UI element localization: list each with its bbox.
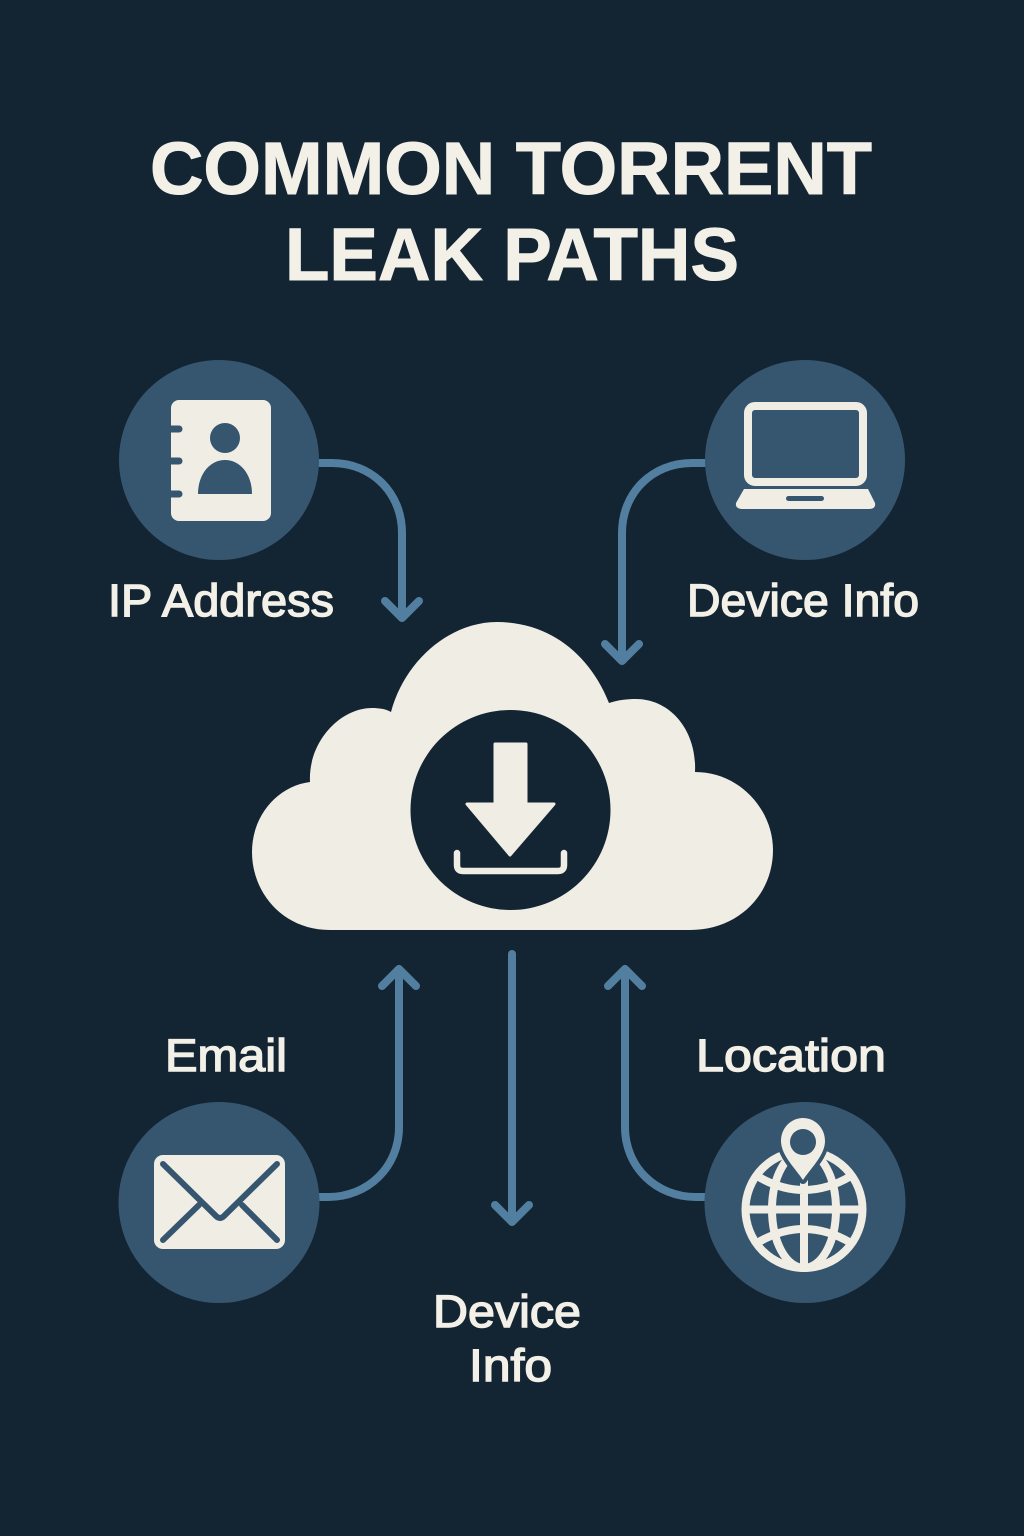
label: IP Address: IP Address [108,575,334,626]
icon: address book [119,360,319,560]
label: Device Info bottom: Device [433,1286,581,1337]
label: Device Info top: Device Info [687,575,919,626]
label: Device Info bottom: Info [469,1340,552,1391]
arrow: Email to cloud [319,969,416,1197]
arrow: Location to cloud [608,969,705,1197]
arrow: Device Info to cloud [605,463,705,661]
label: Device Info bottom [433,1286,581,1391]
title: LEAK PATHS [285,213,739,296]
label: Email: Email [165,1030,287,1081]
icon: envelope [118,1102,320,1303]
title [150,127,872,296]
arrow: IP Address to cloud [319,463,419,618]
title: COMMON TORRENT [150,127,872,210]
icon: laptop [705,360,905,560]
icon: cloud with download [252,622,773,930]
arrow: cloud to Device Info [495,954,529,1222]
icon: globe with pin [704,1102,906,1303]
label: Location: Location [696,1030,886,1081]
